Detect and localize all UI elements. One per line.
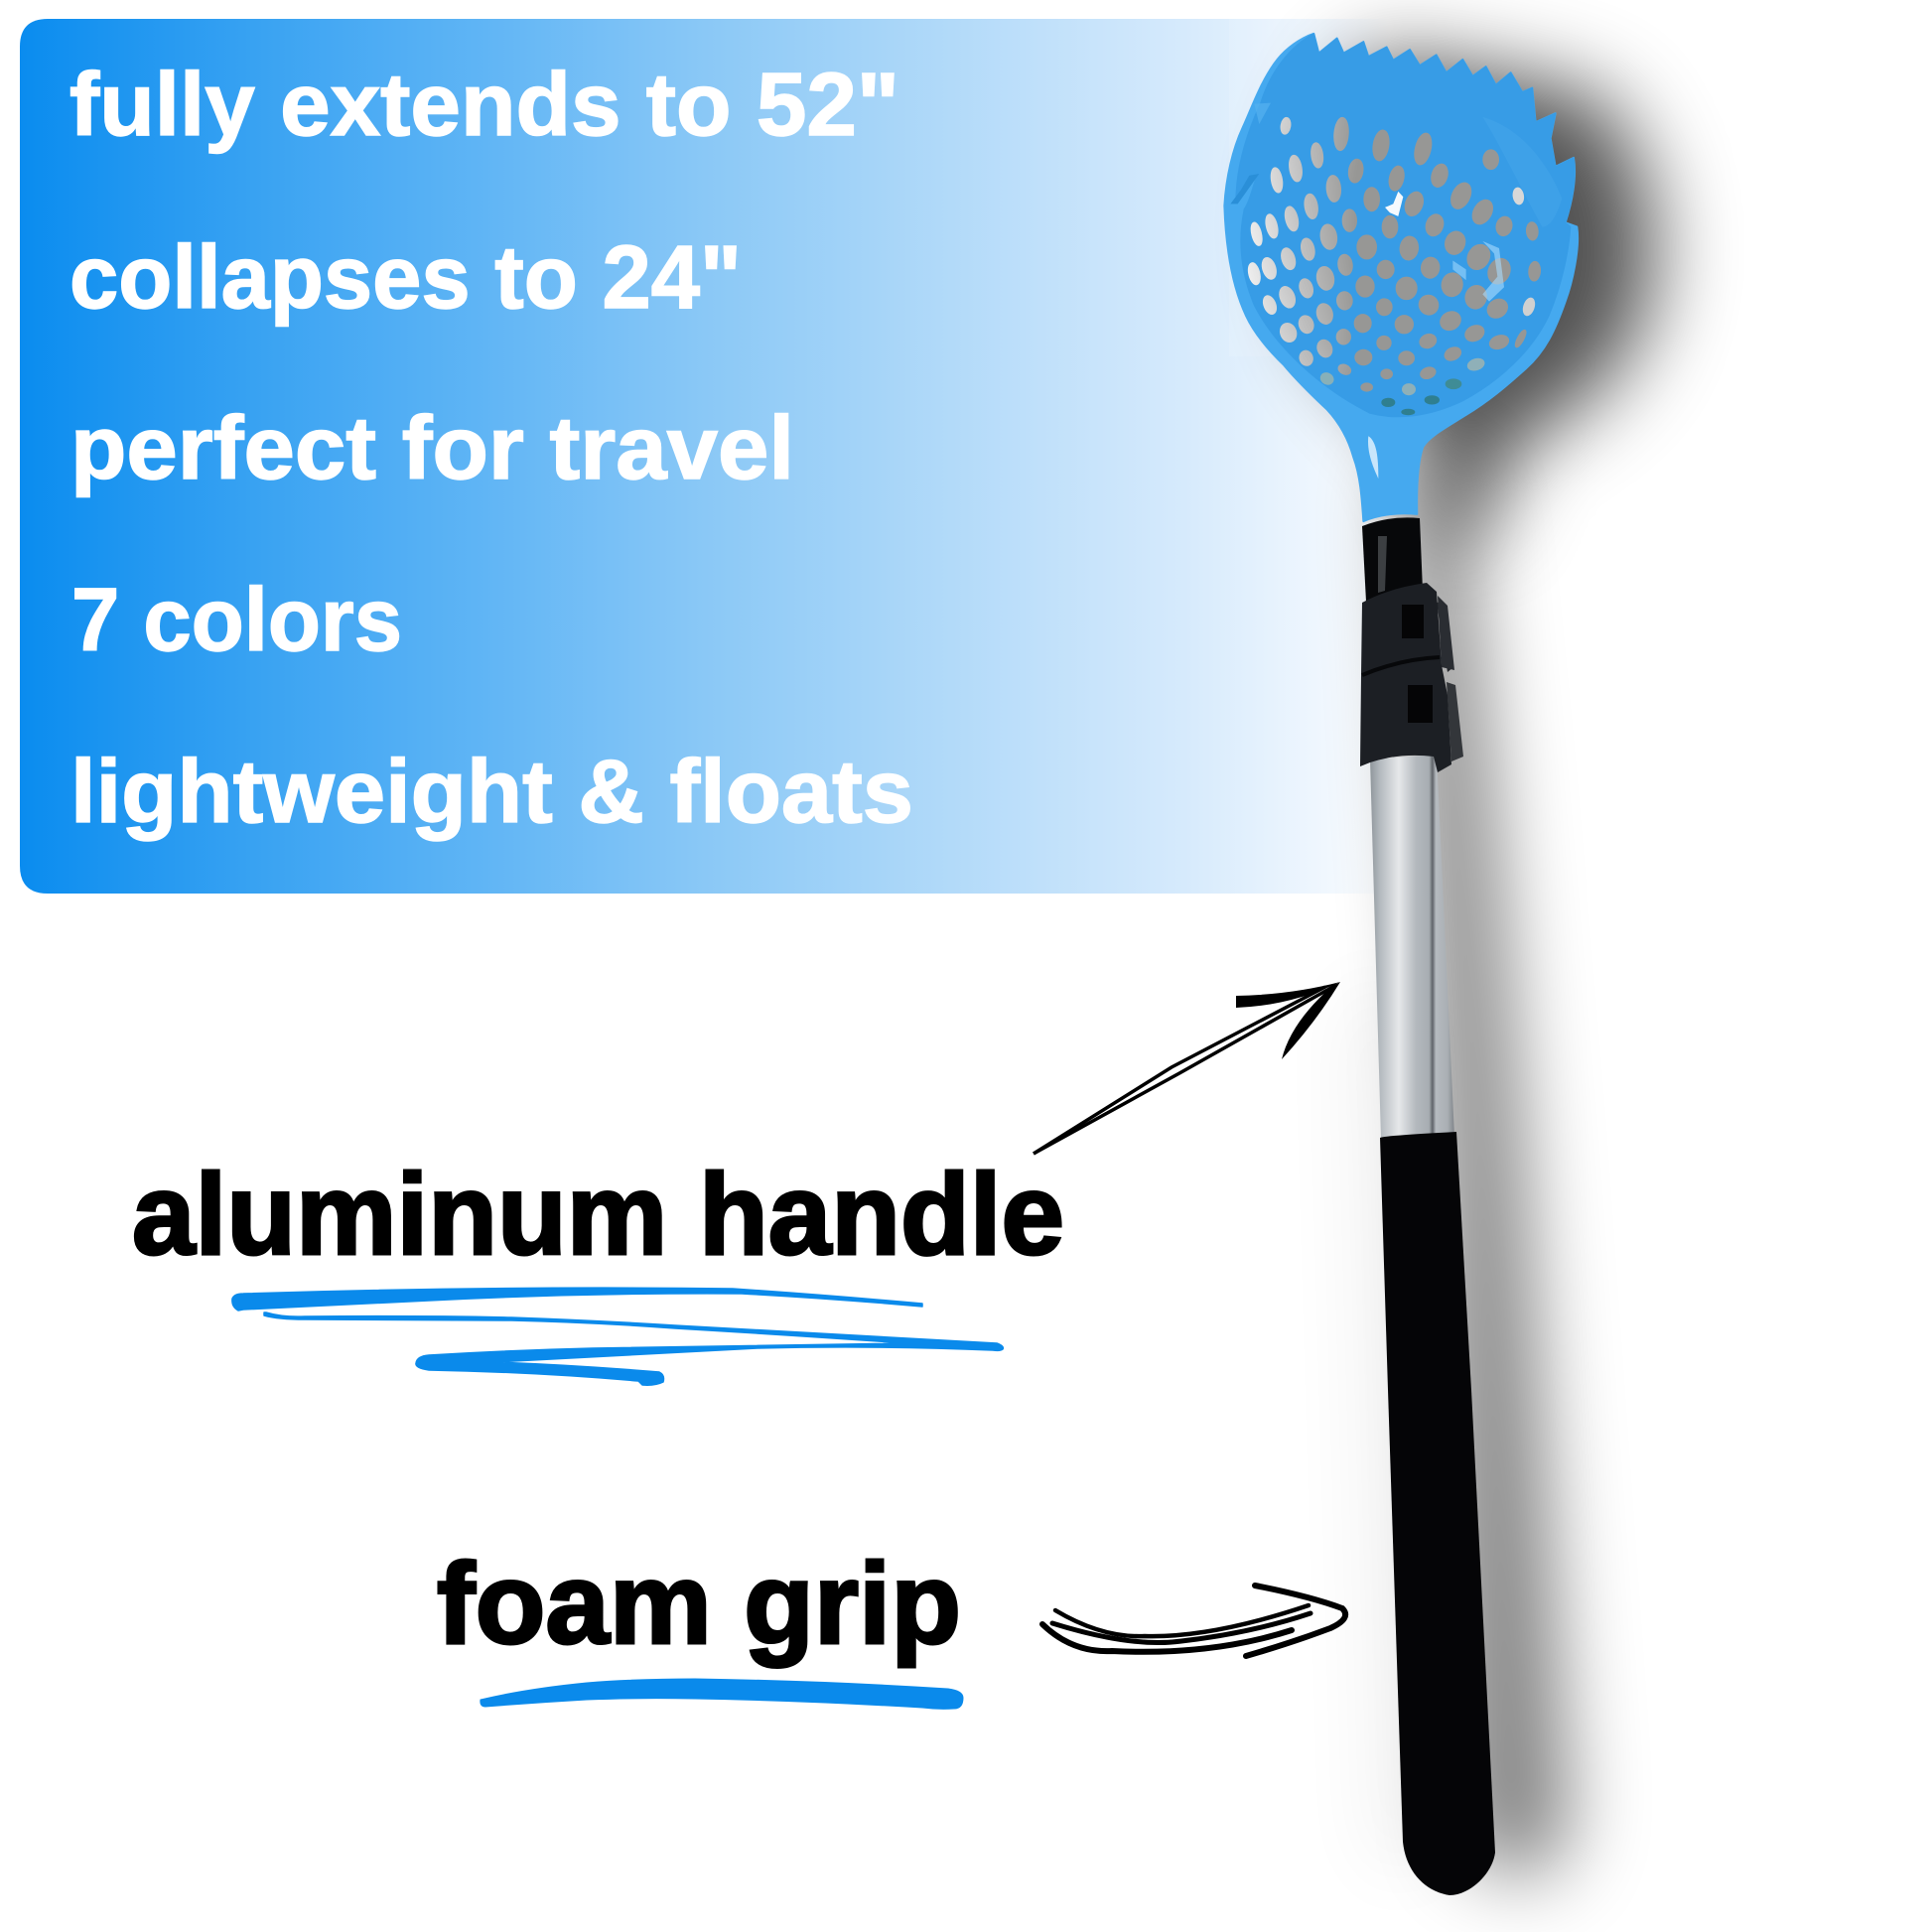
black inner tube <box>1362 517 1423 602</box>
aluminum tube <box>1370 755 1454 1140</box>
foam grip <box>1380 1132 1495 1895</box>
label: aluminum handle <box>132 1150 1064 1385</box>
feature list text <box>69 56 913 842</box>
feature: collapses: collapses to 24" <box>69 228 742 328</box>
feature: perfect for travel: perfect for travel <box>70 399 794 498</box>
scoop inner bowl <box>1236 34 1575 417</box>
photo cutout lightening <box>1229 19 1390 356</box>
label: foam grip <box>437 1539 963 1709</box>
scoop highlight upper right <box>1482 117 1562 227</box>
label text: aluminum handle: aluminum handle <box>132 1150 1064 1279</box>
feature: fully extends: fully extends to 52" <box>69 56 899 155</box>
product: telescoping scoop <box>1224 34 1578 1895</box>
neck highlight <box>1368 436 1378 479</box>
clamp collars <box>1360 583 1463 772</box>
label text: foam grip: foam grip <box>437 1539 961 1668</box>
blue scoop head <box>1224 34 1578 521</box>
feature: lightweight and floats: lightweight & floats <box>70 743 913 842</box>
scoop holes <box>1247 117 1541 414</box>
panel: feature list background <box>20 19 1390 894</box>
blue underline stroke <box>481 1679 963 1709</box>
arrow: to foam grip <box>1042 1586 1345 1656</box>
product shadow <box>1304 48 1657 1878</box>
feature: 7 colors: 7 colors <box>71 571 402 670</box>
left rim notch <box>1230 174 1259 204</box>
glints <box>1385 192 1504 302</box>
blue scribble underline <box>232 1288 1003 1385</box>
soft halo left of handle <box>1360 993 1415 1866</box>
arrow: to aluminum handle <box>1034 982 1340 1154</box>
